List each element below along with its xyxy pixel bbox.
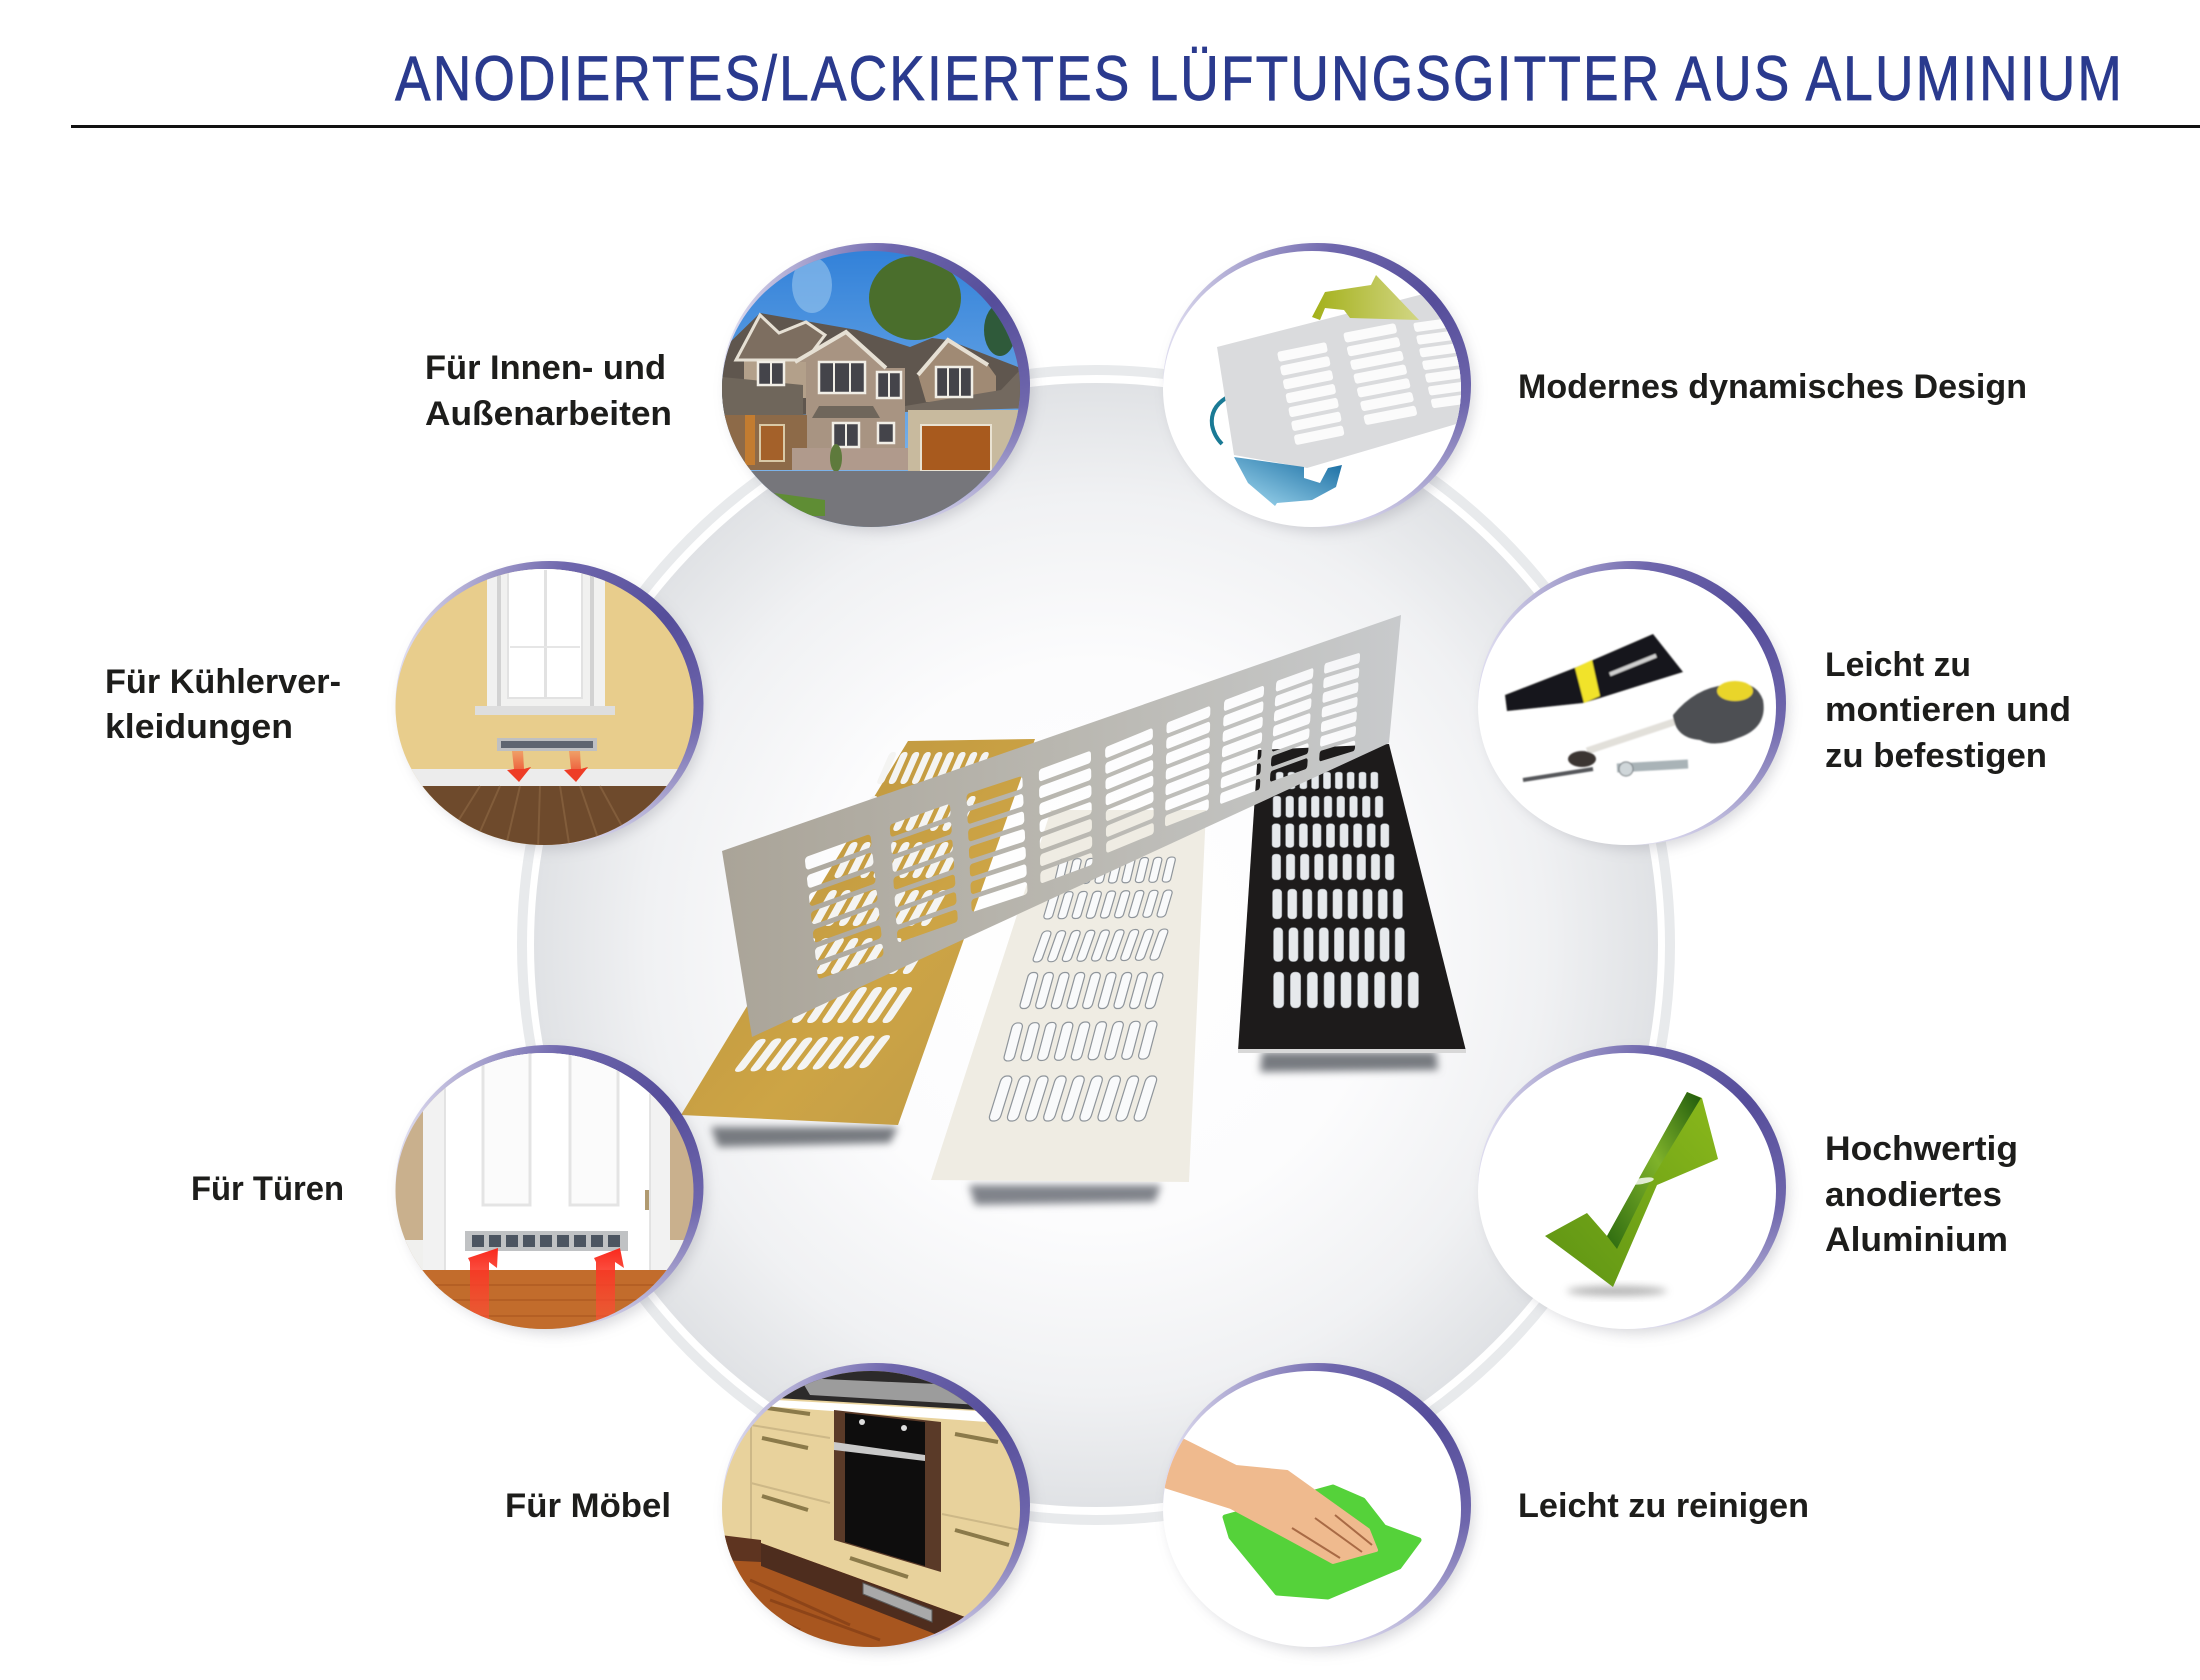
circle: modern design (1160, 240, 1477, 531)
central background disc with ring (522, 370, 1670, 1520)
title rule (71, 125, 2200, 128)
label: Leicht zu montieren und zu befestigen (1825, 646, 2071, 775)
gold grille (681, 739, 1035, 1147)
label: Für Kühlerverkleidungen: Für Kühlerver- (105, 663, 341, 701)
label: Für Innen- und Außenarbeiten: Außenarbeiten (425, 395, 672, 433)
label: Für Innen- und Außenarbeiten (425, 349, 672, 433)
black grille (1238, 744, 1466, 1072)
label: Leicht zu reinigen: Leicht zu reinigen (1518, 1487, 1809, 1525)
label: Für Innen- und Außenarbeiten: Für Innen- und (425, 349, 666, 387)
label: Modernes dynamisches Design: Modernes dynamisches Design (1518, 368, 2027, 406)
label: Leicht zu montieren und zu befestigen: montieren und (1825, 691, 2071, 729)
screwdriver and screws (1523, 681, 1764, 780)
product: four aluminium vent grilles (681, 615, 1466, 1205)
label: Für Möbel: Für Möbel (505, 1487, 671, 1525)
circle: green check mark (1478, 1045, 1788, 1333)
label: Hochwertig anodiertes Aluminium: anodiertes (1825, 1176, 2002, 1214)
label: Hochwertig anodiertes Aluminium (1825, 1130, 2018, 1259)
label: Hochwertig anodiertes Aluminium: Hochwertig (1825, 1130, 2018, 1168)
glue tube (1505, 634, 1683, 711)
circle: tools (1478, 561, 1788, 849)
circle: radiator cover (390, 560, 706, 850)
circle: house (720, 240, 1040, 531)
circle: easy cleaning (1155, 1360, 1473, 1651)
white grille (931, 810, 1206, 1205)
label: Für Kühlerverkleidungen (105, 663, 341, 746)
circle: kitchen furniture (720, 1360, 1032, 1651)
label: Für Kühlerverkleidungen: kleidungen (105, 708, 293, 746)
label: Für Türen: Für Türen (191, 1170, 344, 1208)
label: Hochwertig anodiertes Aluminium: Aluminium (1825, 1221, 2008, 1259)
label: Leicht zu montieren und zu befestigen: zu befestigen (1825, 737, 2047, 775)
silver grille (722, 615, 1401, 1037)
label: Leicht zu montieren und zu befestigen: Leicht zu (1825, 646, 1971, 684)
circle: doors (390, 1040, 706, 1335)
